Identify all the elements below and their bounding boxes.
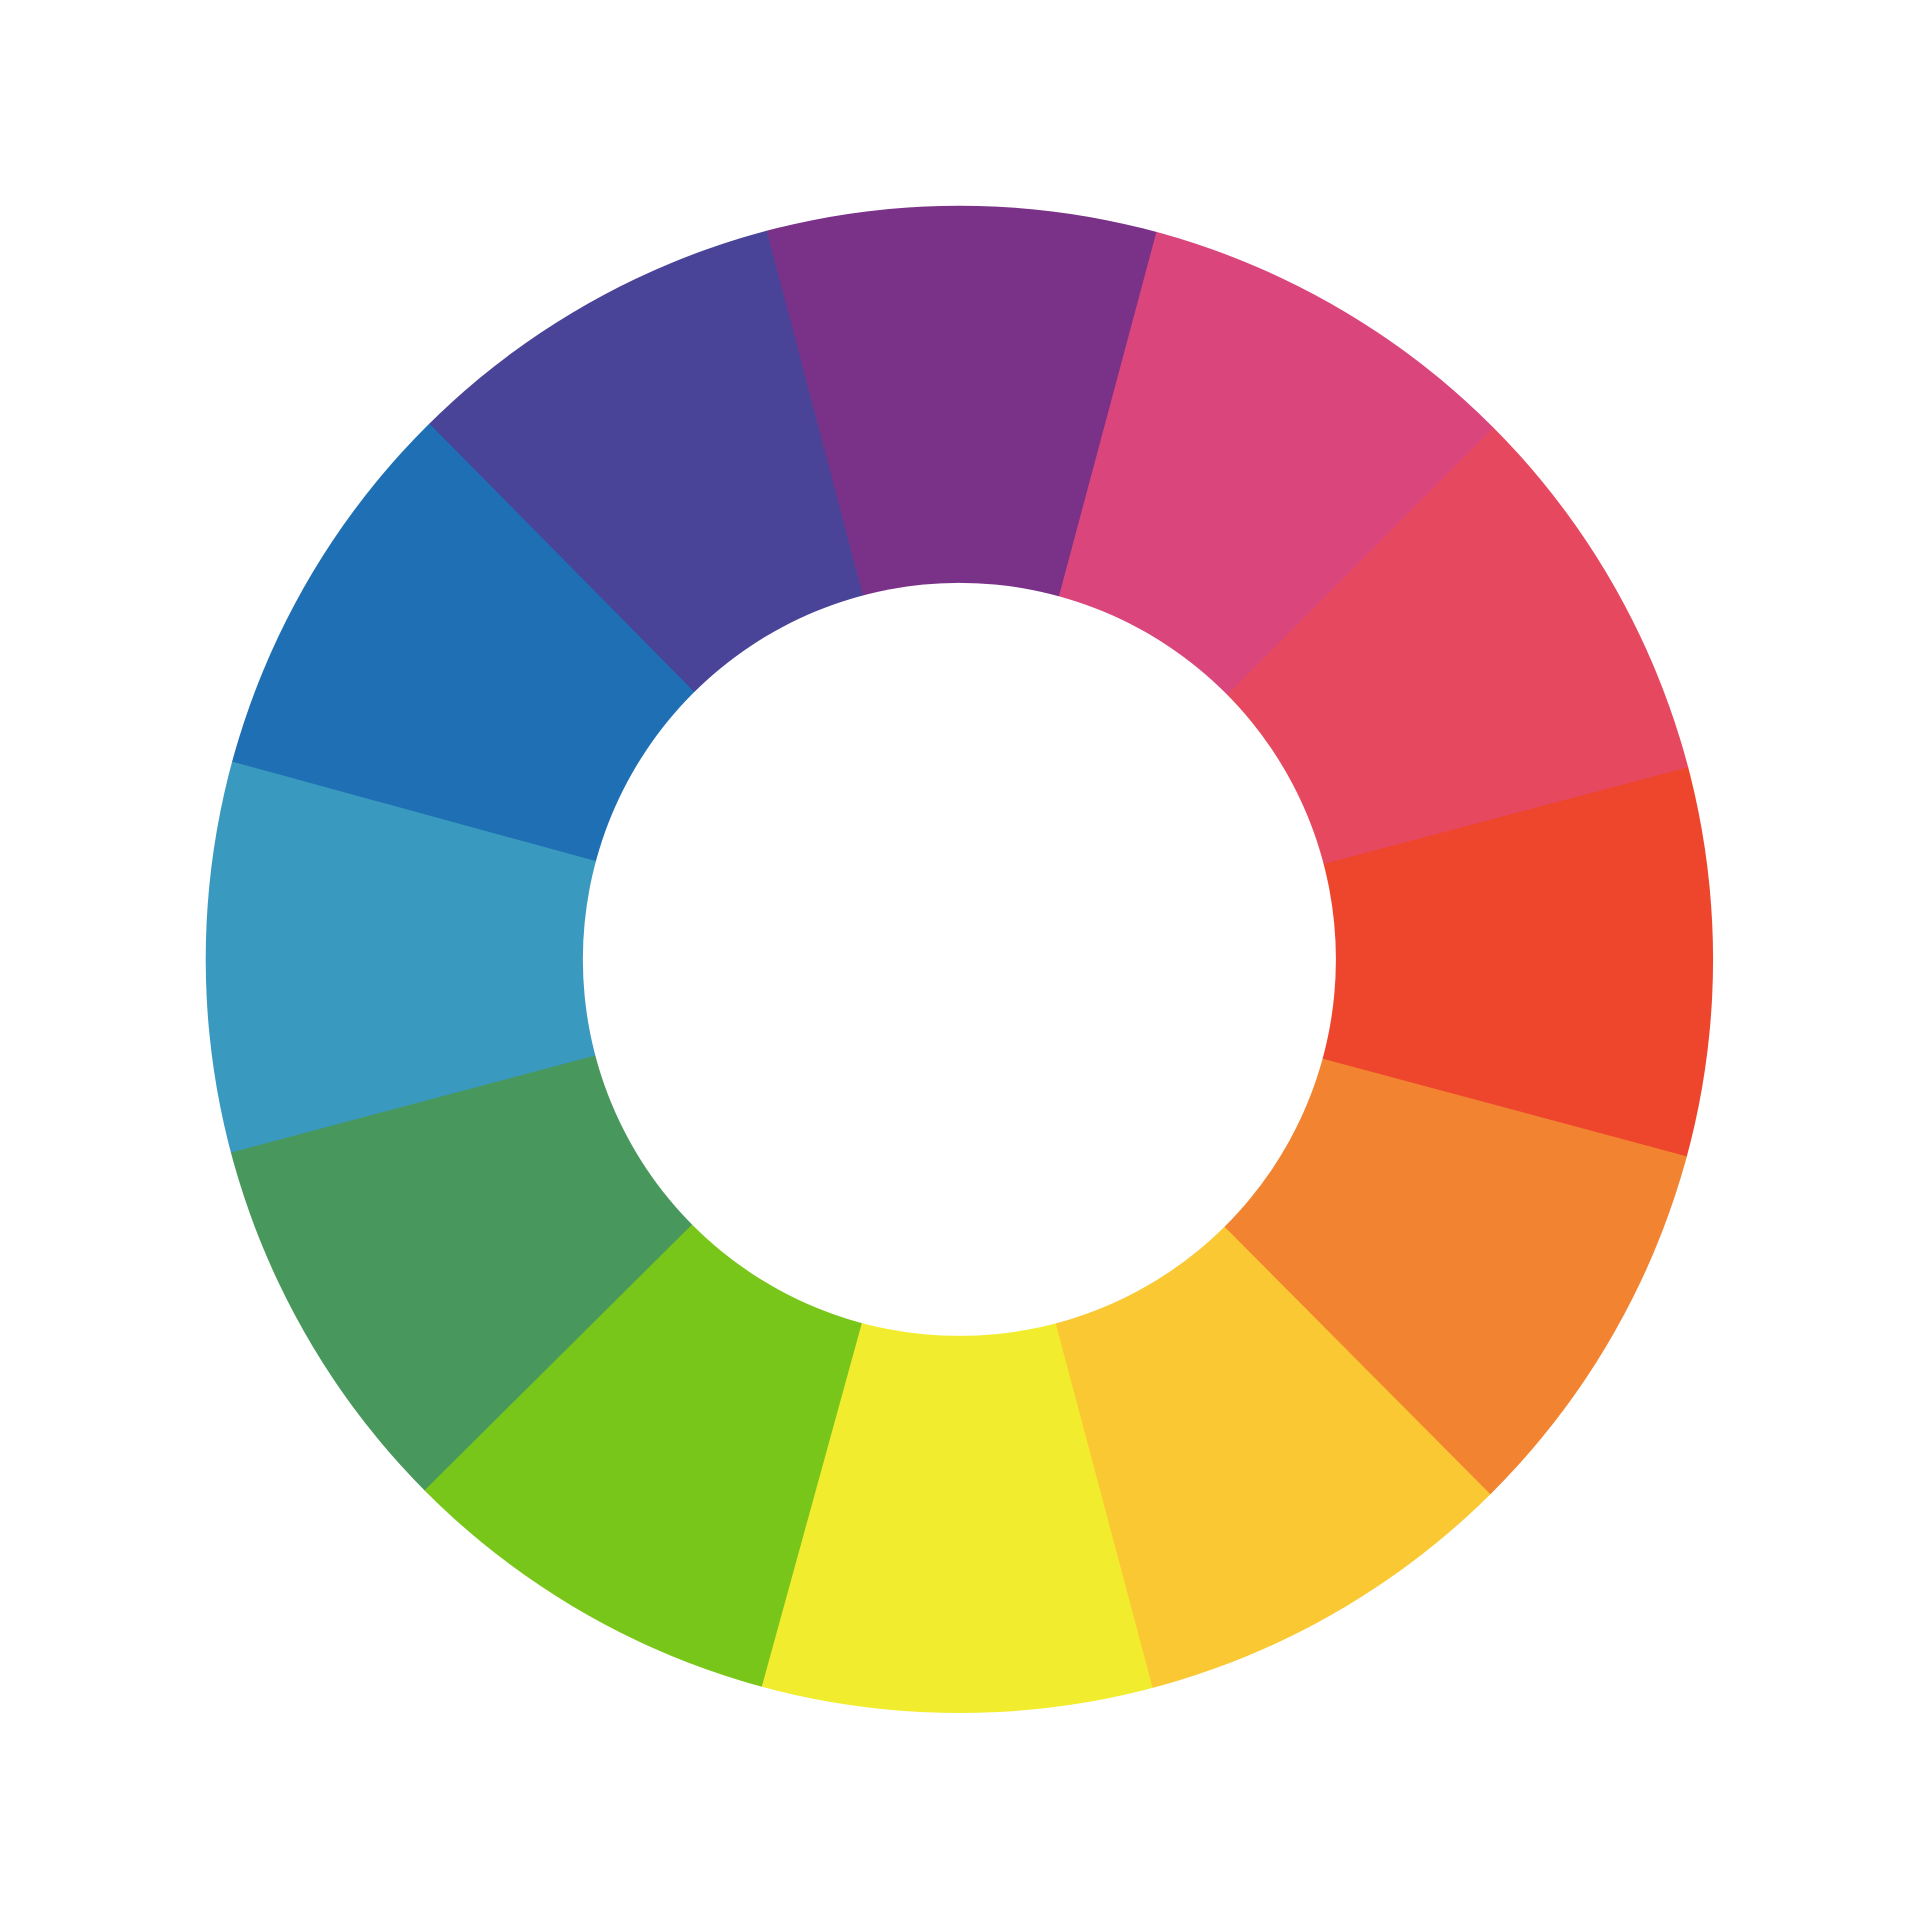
segment: amber [1056,1226,1490,1688]
segment: yellow [761,1323,1153,1713]
segment: red [1322,767,1714,1157]
centre hole [583,583,1336,1336]
segment: teal blue [206,761,596,1152]
segment: rose red [1227,428,1688,864]
segment: purple [766,206,1156,596]
segment: indigo [430,230,863,692]
ring of colour segments [206,206,1714,1713]
segment: lime green [424,1224,862,1687]
chart: twelve-segment colour wheel [206,206,1714,1713]
segment: orange [1224,1058,1687,1494]
segment: blue [232,423,694,861]
segment: green [230,1056,692,1490]
segment: pink [1059,232,1494,695]
